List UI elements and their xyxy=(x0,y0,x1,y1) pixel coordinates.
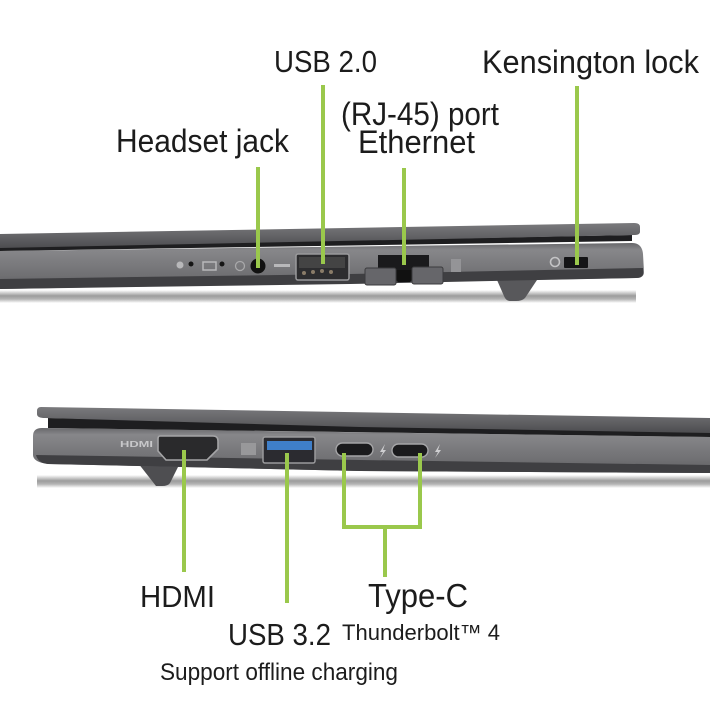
shadow under top laptop xyxy=(0,290,636,303)
lid xyxy=(0,223,640,248)
label: Kensington lock: Kensington lock xyxy=(482,44,700,80)
port: USB 3.2 xyxy=(263,437,315,463)
port: headset jack xyxy=(250,258,266,274)
label: Support offline charging: Support offline charging xyxy=(160,659,398,686)
port: Type-C left xyxy=(336,443,373,456)
shadow under bottom laptop xyxy=(37,475,710,488)
label: Thunderbolt 4: Thunderbolt™ 4 xyxy=(342,620,500,645)
label: USB 3.2: USB 3.2 xyxy=(228,617,331,652)
port: Ethernet xyxy=(365,255,461,285)
top laptop: right side view xyxy=(0,223,644,303)
port: Type-C right xyxy=(392,444,428,457)
icon: Thunderbolt left xyxy=(380,444,386,458)
label: Headset jack: Headset jack xyxy=(116,123,290,159)
foot xyxy=(138,463,180,486)
bottom laptop: left side view xyxy=(33,407,710,488)
label: HDMI engraved: HDMI xyxy=(120,440,153,449)
label: Type-C: Type-C xyxy=(368,577,468,614)
status icons xyxy=(176,262,290,270)
base body xyxy=(0,243,644,289)
icon: USB 3.2 marker xyxy=(241,443,256,455)
callout lines xyxy=(184,85,577,603)
lid xyxy=(37,407,710,433)
label: USB 2.0: USB 2.0 xyxy=(274,44,377,79)
base dark lower band xyxy=(0,268,643,289)
base body xyxy=(33,428,710,473)
foot xyxy=(497,280,537,301)
hinge gap xyxy=(48,418,710,437)
label: (RJ-45) port: (RJ-45) port xyxy=(341,96,499,132)
icon: Thunderbolt right xyxy=(435,444,441,458)
port: Kensington lock xyxy=(550,257,588,268)
hinge gap xyxy=(0,235,632,251)
port: USB 2.0 xyxy=(296,254,349,280)
base dark lower band xyxy=(36,455,710,473)
port: HDMI xyxy=(158,436,218,460)
label: Ethernet: Ethernet xyxy=(358,124,475,160)
label: HDMI: HDMI xyxy=(140,579,215,614)
